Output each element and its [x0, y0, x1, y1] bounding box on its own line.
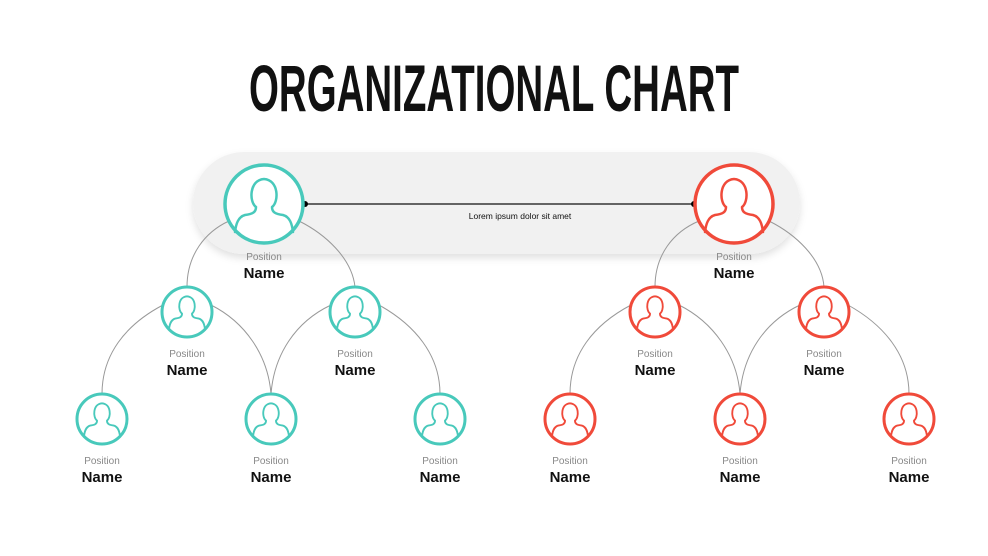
node: red level 3 a	[545, 394, 595, 486]
node: teal top: Name	[244, 265, 284, 282]
link line with label: Lorem ipsum dolor sit amet	[469, 211, 572, 221]
panel: top pill	[193, 152, 800, 254]
node: red level 3 a: Position	[552, 456, 588, 467]
connectors	[102, 221, 909, 394]
node: red top	[695, 165, 773, 282]
node: red level 3 b	[715, 394, 765, 486]
node: red level 3 b: Position	[722, 456, 758, 467]
node: red top: Position	[716, 252, 752, 263]
node: red level 2 left: Name	[635, 362, 675, 379]
node: red level 3 b: Name	[720, 469, 760, 486]
node: teal top	[225, 165, 303, 282]
node: red level 3 a: Name	[550, 469, 590, 486]
node: teal level 2 right: Position	[337, 349, 373, 360]
node: red level 3 c	[884, 394, 934, 486]
node: teal level 3 b: Name	[251, 469, 291, 486]
node: red level 3 c: Name	[889, 469, 929, 486]
node: red level 3 c: Position	[891, 456, 927, 467]
node: teal level 3 c: Position	[422, 456, 458, 467]
node: teal level 2 left: Position	[169, 349, 205, 360]
node: teal level 3 a: Name	[82, 469, 122, 486]
node: teal level 2 left	[162, 287, 212, 379]
node: teal level 2 right: Name	[335, 362, 375, 379]
node: teal level 2 left: Name	[167, 362, 207, 379]
node: red level 2 right	[799, 287, 849, 379]
link line with label	[302, 201, 697, 221]
node: teal top: Position	[246, 252, 282, 263]
node: teal level 3 c: Name	[420, 469, 460, 486]
node: red level 2 right: Position	[806, 349, 842, 360]
node: teal level 3 a: Position	[84, 456, 120, 467]
node: red level 2 left: Position	[637, 349, 673, 360]
node: teal level 3 b	[246, 394, 296, 486]
node: red level 2 right: Name	[804, 362, 844, 379]
node: teal level 3 a	[77, 394, 127, 486]
node: teal level 3 b: Position	[253, 456, 289, 467]
node: red top: Name	[714, 265, 754, 282]
node: teal level 2 right	[330, 287, 380, 379]
node: red level 2 left	[630, 287, 680, 379]
node: teal level 3 c	[415, 394, 465, 486]
